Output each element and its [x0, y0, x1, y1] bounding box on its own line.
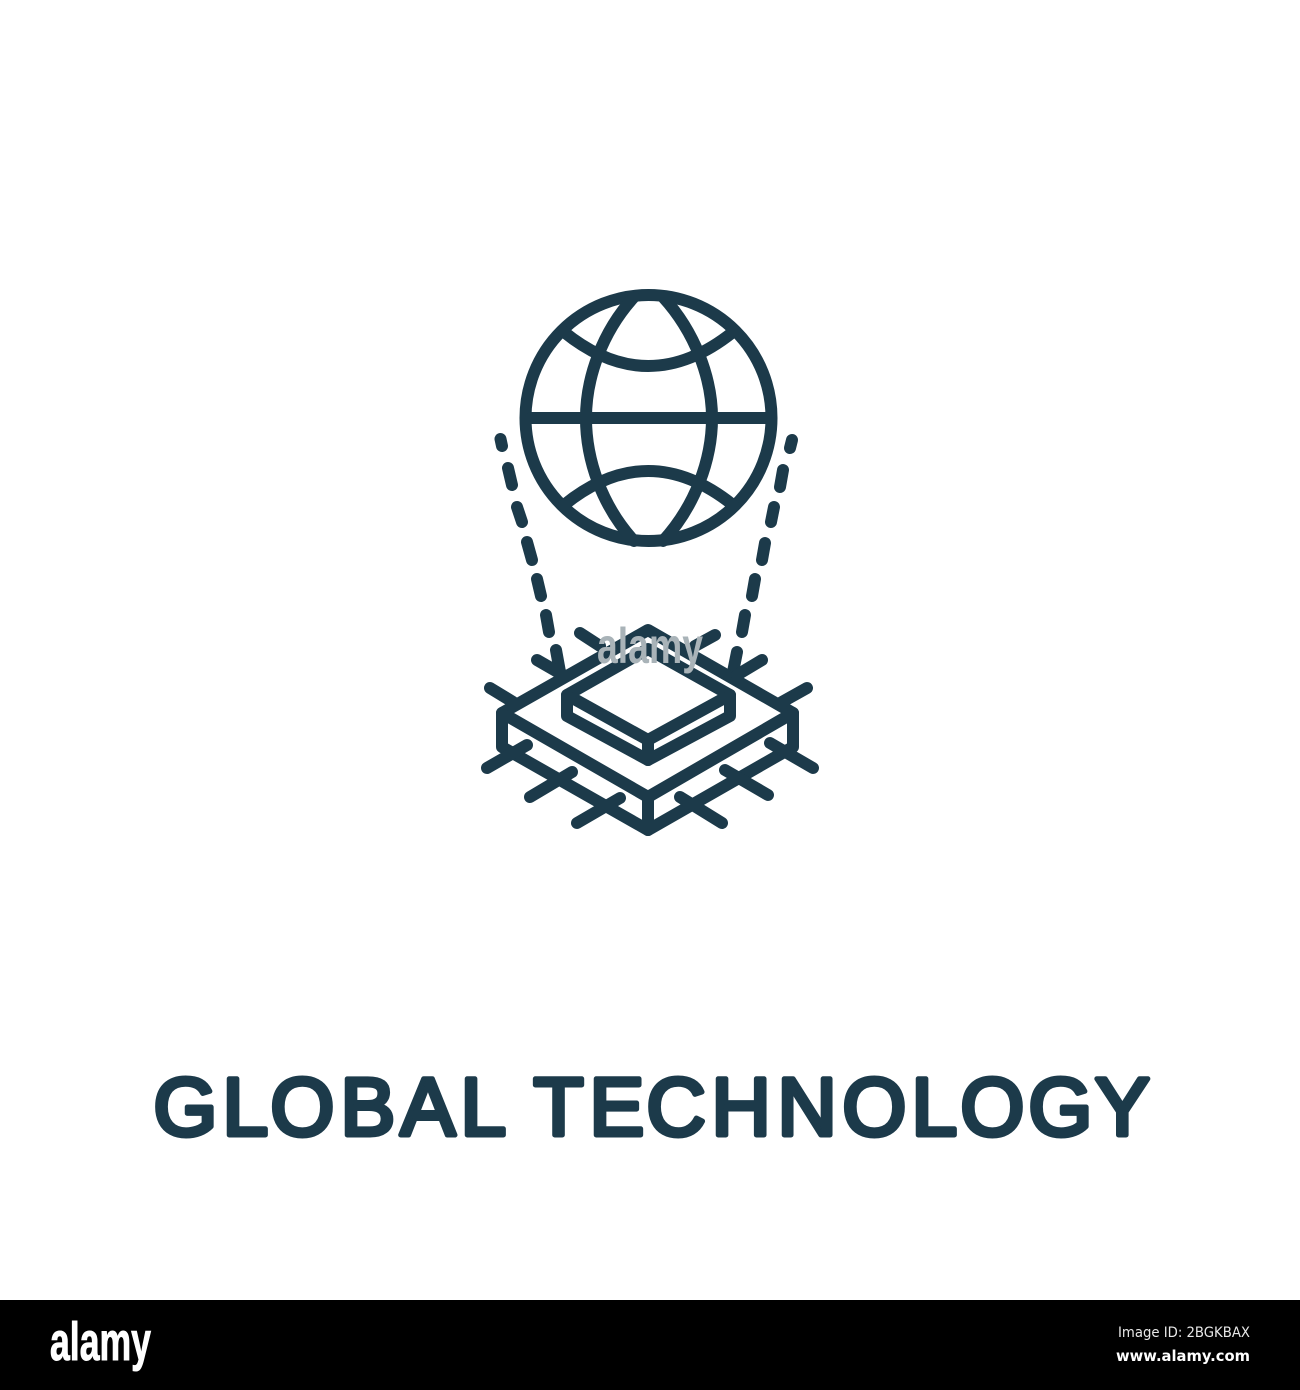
image id: Image ID: 2BGKBAX [1118, 1325, 1250, 1341]
dashed projection line: right [733, 440, 792, 672]
icon: chip pins [487, 633, 813, 823]
dashed projection line: left [500, 439, 560, 672]
icon: circuit board base [502, 630, 793, 830]
icon: processor chip [567, 649, 730, 760]
watermark over icon: alamy [597, 618, 703, 674]
icon: global technology [487, 295, 813, 830]
icon: globe [526, 295, 772, 541]
footer bar [0, 1300, 1300, 1390]
title: GLOBAL TECHNOLOGY [154, 1062, 1150, 1153]
footer logo: alamy [50, 1312, 151, 1372]
website: www.alamy.com [1116, 1347, 1250, 1365]
